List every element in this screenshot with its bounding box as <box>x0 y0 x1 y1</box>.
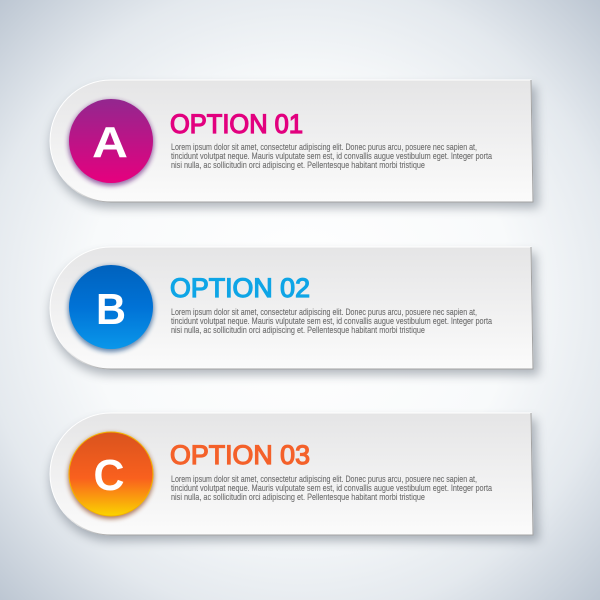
body text 03 <box>171 474 492 503</box>
body text 02: nisi nulla, ac sollicitudin orci adipiscing et. Pellentesque habitant morbi tristique <box>171 325 425 336</box>
card shadow 02 <box>50 253 539 375</box>
circle glow A <box>68 100 154 186</box>
circle glow B <box>68 266 154 352</box>
body text 02 <box>171 307 492 336</box>
heading 03: OPTION 03 <box>170 440 310 470</box>
panel: option 03 <box>50 413 539 541</box>
card shadow 01 <box>50 86 539 208</box>
heading 02: OPTION 02 <box>170 273 310 303</box>
body text 02: Lorem ipsum dolor sit amet, consectetur adipiscing elit. Donec purus arcu, posuere nec sapien at, <box>171 307 477 318</box>
body text 03: nisi nulla, ac sollicitudin orci adipiscing et. Pellentesque habitant morbi tristique <box>171 492 425 503</box>
card shadow 03 <box>50 419 539 541</box>
body text 01: nisi nulla, ac sollicitudin orci adipiscing et. Pellentesque habitant morbi tristique <box>171 160 425 171</box>
card edge 02 <box>111 247 533 369</box>
letter C: C <box>94 451 124 500</box>
card 01 <box>50 80 533 202</box>
heading 01: OPTION 01 <box>170 109 303 139</box>
badge B <box>69 265 153 349</box>
body text 01: tincidunt volutpat neque. Mauris vulputate sem est, id convallis augue vestibulum eget. Integer porta <box>171 151 492 162</box>
card edge arc 02 <box>58 338 111 369</box>
panel: option 01 <box>50 80 539 208</box>
body text 01: Lorem ipsum dolor sit amet, consectetur adipiscing elit. Donec purus arcu, posuere nec sapien at, <box>171 142 477 153</box>
card 03 <box>50 413 533 535</box>
letter B: B <box>96 285 126 334</box>
card edge arc 03 <box>58 504 111 535</box>
circle glow C <box>68 433 154 519</box>
body text 02: tincidunt volutpat neque. Mauris vulputate sem est, id convallis augue vestibulum eget. Integer porta <box>171 316 492 327</box>
letter A: A <box>92 118 128 167</box>
card edge 01 <box>111 80 533 202</box>
card edge arc 01 <box>58 171 111 202</box>
card edge 03 <box>111 413 533 535</box>
badge A <box>69 99 153 183</box>
card 02 <box>50 247 533 369</box>
body text 03: Lorem ipsum dolor sit amet, consectetur adipiscing elit. Donec purus arcu, posuere nec sapien at, <box>171 474 477 485</box>
body text 01 <box>171 142 492 171</box>
badge C <box>69 432 153 516</box>
body text 03: tincidunt volutpat neque. Mauris vulputate sem est, id convallis augue vestibulum eget. Integer porta <box>171 483 492 494</box>
panel: option 02 <box>50 247 539 375</box>
